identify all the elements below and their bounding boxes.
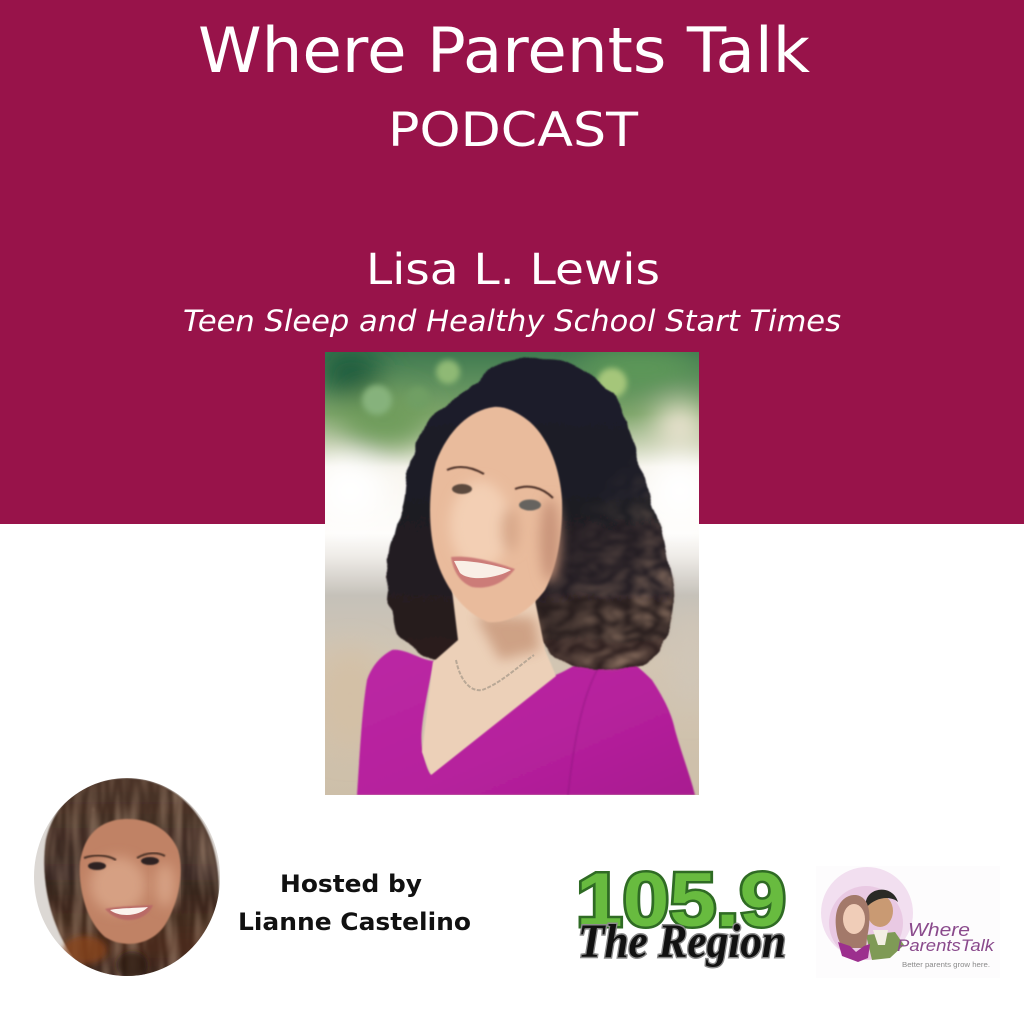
- facial features: [447, 467, 553, 588]
- guest photo: [314, 348, 710, 795]
- logo: 105.9 The Region: The Region: [578, 915, 786, 968]
- logo: Where Parents Talk: Better parents grow here.: [902, 962, 990, 969]
- face: [430, 407, 562, 622]
- host face: [80, 819, 181, 944]
- host features: [84, 853, 165, 920]
- host hair strands: [44, 778, 219, 990]
- host hair: [44, 778, 219, 990]
- girl: [836, 895, 870, 962]
- hair curl texture: [536, 476, 675, 671]
- guest name: Lisa L. Lewis: [366, 245, 660, 295]
- panel: maroon header: [0, 0, 1024, 524]
- logo: 105.9 The Region: 105.9: [576, 858, 786, 943]
- subtitle: podcast: PODCAST: [388, 103, 638, 158]
- logo: 105.9 The Region: [576, 858, 786, 968]
- episode topic: Teen Sleep and Healthy School Start Times: [183, 304, 841, 338]
- title: Where Parents Talk: [198, 14, 810, 87]
- hosted by label: Hosted by: [280, 870, 422, 898]
- host portrait: [34, 778, 220, 976]
- logo: Where Parents Talk: [816, 866, 1000, 978]
- host name: Lianne Castelino: [238, 908, 471, 936]
- neck and chest: [422, 590, 556, 775]
- boy: [866, 890, 904, 960]
- shirt: [357, 648, 695, 795]
- hair: [388, 359, 674, 669]
- logo: Where Parents Talk: ParentsTalk: [897, 936, 996, 955]
- necklace: [456, 655, 534, 690]
- logo wordmark: Where: [908, 920, 970, 940]
